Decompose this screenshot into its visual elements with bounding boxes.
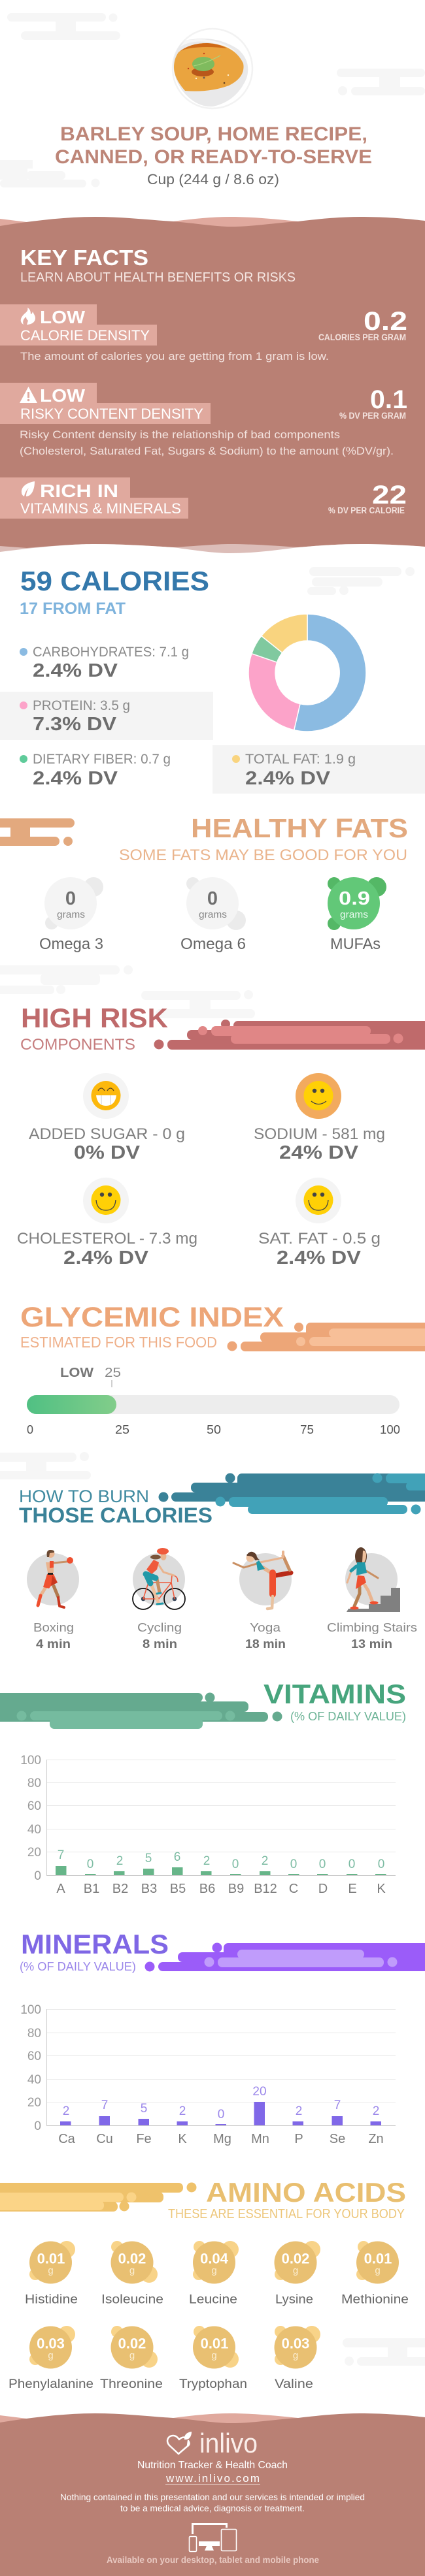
item: sodium [254, 1073, 385, 1163]
amino: histidine [25, 2242, 78, 2307]
bar chart: minerals: 2 [373, 2104, 379, 2118]
disclaimer: to be a medical advice, diagnosis or treatment. [120, 2504, 305, 2513]
item: sodium: SODIUM - 581 mg [254, 1125, 385, 1143]
bar chart: minerals: 20 [252, 2085, 267, 2099]
activity: boxing [27, 1550, 79, 1607]
panel: key facts [0, 217, 425, 556]
item: cholesterol: 2.4% DV [63, 1248, 149, 1268]
activity: yoga [233, 1552, 292, 1609]
bar chart: minerals: Fe [136, 2132, 152, 2146]
fact: risky content density [0, 383, 407, 457]
amino: histidine: 0.01 [37, 2251, 65, 2266]
panel: healthy fats [0, 813, 408, 953]
title: CANNED, OR READY-TO-SERVE [55, 146, 372, 168]
amino: tryptophan [179, 2326, 247, 2391]
heading: key facts: KEY FACTS [20, 246, 148, 270]
badge: mufas: 0.9 [339, 888, 370, 909]
heading: how to burn [19, 1487, 212, 1527]
amino: leucine: g [211, 2265, 217, 2276]
heading: how to burn: THOSE CALORIES [19, 1504, 212, 1527]
bar chart: vitamins: 0 [290, 1858, 297, 1871]
heading: calories: 17 FROM FAT [20, 600, 126, 618]
macro: protein [0, 692, 213, 740]
badge: mufas [328, 877, 386, 953]
amino: tryptophan: 0.01 [201, 2336, 228, 2351]
bar chart: vitamins: 0 [34, 1869, 41, 1883]
bar chart: vitamins: 0 [232, 1858, 239, 1871]
heading: amino acids [168, 2177, 406, 2221]
badge: omega 6: Omega 6 [180, 935, 246, 953]
logo: inlivo: inlivo [199, 2428, 258, 2458]
tagline: Nutrition Tracker & Health Coach [137, 2460, 288, 2471]
gauge: LOW [60, 1366, 94, 1380]
activity labels: 8 min [143, 1637, 177, 1650]
bar chart: minerals: 2 [179, 2104, 186, 2118]
macro: total fat [212, 745, 425, 794]
panel: high risk components [0, 965, 425, 1268]
heading: healthy fats: HEALTHY FATS [191, 813, 408, 843]
bar chart: vitamins: 60 [27, 1799, 41, 1813]
fact: calorie density: LOW [40, 307, 86, 327]
macro: protein: 7.3% DV [33, 714, 117, 735]
decorative header bar [0, 818, 75, 846]
badge: omega 6: 0 [207, 888, 218, 909]
badge: omega 3: Omega 3 [39, 935, 103, 953]
background cloud [0, 1452, 91, 1479]
icon: warning [20, 387, 37, 403]
heading: minerals [20, 1929, 169, 1973]
disclaimer [60, 2492, 365, 2513]
amino: leucine: Leucine [189, 2293, 237, 2307]
amino: phenylalanine: Phenylalanine [8, 2377, 94, 2391]
heading: calories [20, 566, 209, 618]
bar chart: minerals: 7 [101, 2099, 108, 2112]
macro: protein: PROTEIN: 3.5 g [33, 698, 130, 713]
macro: carbohydrates: 2.4% DV [33, 660, 118, 681]
amino: tryptophan: g [211, 2350, 217, 2361]
fact: rich in vitamins and minerals [0, 477, 407, 519]
amino: methionine: Methionine [341, 2293, 409, 2307]
heading: glycemic index: ESTIMATED FOR THIS FOOD [20, 1334, 217, 1351]
bar chart: vitamins: B9 [228, 1882, 244, 1896]
bar chart: vitamins: A [56, 1882, 65, 1896]
bar chart: vitamins: 80 [27, 1777, 41, 1790]
bar chart: vitamins: 0 [319, 1858, 326, 1871]
bar chart: minerals: Mg [213, 2132, 231, 2146]
heading: healthy fats [119, 813, 408, 864]
panel: minerals [20, 1929, 425, 2146]
amino badge blobs [29, 2241, 369, 2368]
bar chart: vitamins: 2 [203, 1854, 210, 1868]
activity labels: Boxing [33, 1621, 74, 1634]
heading: how to burn: HOW TO BURN [19, 1487, 149, 1506]
badge: omega 3 [39, 877, 103, 953]
activity labels: 4 min [36, 1637, 71, 1650]
activity labels [33, 1621, 417, 1650]
bar chart: minerals: P [294, 2132, 303, 2146]
bar chart: minerals: 0 [218, 2108, 224, 2121]
disclaimer: Nothing contained in this presentation and our services is intended or implied [60, 2492, 365, 2502]
bar chart: minerals: 40 [27, 2073, 41, 2087]
availability note: Available on your desktop, tablet and mobile phone [107, 2554, 319, 2565]
fact: risky content density: 0.1 [370, 385, 407, 414]
decorative header bar [145, 1942, 425, 1971]
bar chart: vitamins: 100 [20, 1754, 41, 1767]
fact: calorie density: The amount of calories you are getting from 1 gram is low. [20, 350, 329, 362]
bar chart: vitamins [20, 1754, 396, 1896]
bar chart: vitamins: D [318, 1882, 328, 1896]
bar chart: vitamins: 7 [58, 1848, 64, 1862]
activity: cycling [133, 1548, 185, 1609]
badge: mufas: MUFAs [330, 935, 381, 953]
panel: vitamins [0, 1679, 406, 1896]
panel: glycemic index [20, 1302, 425, 1436]
bar chart: minerals: 60 [27, 2050, 41, 2063]
heading: glycemic index [20, 1302, 284, 1351]
amino: methionine [341, 2242, 409, 2307]
bar chart: vitamins: 0 [378, 1858, 384, 1871]
bar chart: minerals: 2 [296, 2104, 302, 2118]
panel: amino acids [0, 2177, 425, 2391]
bar chart: vitamins: 20 [27, 1846, 41, 1860]
macro: carbohydrates: CARBOHYDRATES: 7.1 g [33, 645, 189, 660]
amino: lysine: Lysine [275, 2293, 313, 2307]
amino: valine: 0.03 [282, 2336, 309, 2351]
fact: calorie density [0, 304, 407, 362]
icon: devices [190, 2524, 237, 2551]
bar chart: vitamins: B2 [112, 1882, 128, 1896]
fact: rich in vitamins and minerals: VITAMINS & MINERALS [20, 500, 181, 517]
fact: risky content density: (Cholesterol, Saturated Fat, Sugars & Sodium) to the amount (%DV/gr). [20, 445, 394, 457]
item: sodium: 24% DV [279, 1142, 359, 1163]
decorative header bar [154, 1020, 425, 1050]
heading: minerals: MINERALS [21, 1929, 169, 1959]
item: added sugar: 0% DV [74, 1142, 141, 1163]
bar chart: vitamins: 2 [116, 1854, 123, 1868]
item: saturated fat: SAT. FAT - 0.5 g [258, 1230, 381, 1248]
background cloud [307, 567, 415, 595]
badge: omega 3: 0 [65, 888, 76, 909]
decorative header bar [0, 2183, 196, 2212]
item: added sugar [29, 1073, 185, 1163]
donut chart [248, 614, 366, 732]
activity labels: 13 min [351, 1637, 392, 1650]
amino: isoleucine: 0.02 [118, 2251, 146, 2266]
fact: risky content density: RISKY CONTENT DENSITY [20, 406, 203, 422]
amino: histidine: Histidine [25, 2293, 78, 2307]
heading: vitamins [264, 1679, 406, 1723]
amino: isoleucine: Isoleucine [101, 2293, 163, 2307]
fact: calorie density: CALORIE DENSITY [20, 327, 150, 344]
item: cholesterol: CHOLESTEROL - 7.3 mg [17, 1230, 197, 1248]
bar chart: minerals: Cu [96, 2132, 113, 2146]
macro: total fat: 2.4% DV [245, 768, 331, 789]
macro: dietary fiber: 2.4% DV [33, 768, 118, 789]
fact: calorie density: CALORIES PER GRAM [318, 332, 406, 342]
fact: risky content density: % DV PER GRAM [339, 411, 406, 421]
amino: lysine: g [293, 2265, 298, 2276]
macro: dietary fiber [20, 752, 171, 789]
panel: footer [0, 2413, 425, 2576]
bar chart: vitamins: 6 [174, 1850, 180, 1864]
macro: total fat: TOTAL FAT: 1.9 g [245, 752, 356, 767]
activity labels: Yoga [250, 1621, 281, 1634]
bar chart: minerals: 20 [27, 2096, 41, 2110]
icon: flame [21, 308, 35, 325]
amino: phenylalanine [8, 2326, 94, 2391]
logo: inlivo [167, 2428, 258, 2458]
bar chart: vitamins: B5 [170, 1882, 186, 1896]
bar chart: minerals: 7 [334, 2099, 341, 2112]
panel background with waves [0, 217, 425, 556]
fact: risky content density: LOW [40, 385, 86, 406]
badge: omega 6: grams [199, 909, 227, 920]
bar chart: vitamins: C [289, 1882, 298, 1896]
item: saturated fat: 2.4% DV [277, 1248, 362, 1268]
bar chart: minerals: 5 [141, 2102, 147, 2116]
amino: phenylalanine: g [48, 2350, 54, 2361]
gauge: 50 [207, 1423, 221, 1436]
bar chart: vitamins: 40 [27, 1823, 41, 1837]
macro: carbohydrates [20, 645, 189, 681]
bar chart: minerals: Zn [368, 2132, 384, 2146]
bar chart: minerals: 100 [20, 2003, 41, 2017]
background clouds [0, 965, 255, 1018]
bar chart: minerals: K [178, 2132, 187, 2146]
amino: threonine [100, 2326, 163, 2391]
serving size: Cup (244 g / 8.6 oz) [147, 171, 279, 187]
bar chart: vitamins: B1 [84, 1882, 99, 1896]
heading: key facts [20, 246, 296, 285]
bar chart: minerals: Ca [58, 2132, 76, 2146]
heading: calories: 59 CALORIES [20, 566, 209, 596]
bar chart: vitamins: 0 [87, 1858, 94, 1871]
amino: lysine: 0.02 [282, 2251, 309, 2266]
heading: vitamins: VITAMINS [264, 1679, 406, 1709]
activity labels: Climbing Stairs [327, 1621, 417, 1634]
fact: risky content density: Risky Content density is the relationship of bad components [20, 428, 340, 441]
amino: histidine: g [48, 2265, 54, 2276]
bar chart: vitamins: B6 [199, 1882, 215, 1896]
heading: vitamins: (% OF DAILY VALUE) [290, 1710, 406, 1723]
panel: how to burn calories [0, 1452, 425, 1650]
gauge: 25 [105, 1366, 121, 1380]
footer background with waves [0, 2413, 425, 2576]
background clouds [0, 13, 425, 187]
decorative header bar [228, 1323, 425, 1351]
amino: leucine [189, 2242, 237, 2307]
gauge: 100 [380, 1423, 400, 1436]
heading: healthy fats: SOME FATS MAY BE GOOD FOR YOU [119, 846, 407, 864]
decorative header bar [158, 1473, 425, 1514]
badge: omega 6 [180, 877, 246, 953]
fact: rich in vitamins and minerals: RICH IN [40, 481, 118, 501]
fact: rich in vitamins and minerals: 22 [372, 481, 407, 509]
gauge: 0 [27, 1423, 33, 1436]
decorative header bar [0, 1693, 282, 1729]
amino: lysine [275, 2242, 316, 2307]
amino: isoleucine [101, 2242, 163, 2307]
amino: tryptophan: Tryptophan [179, 2377, 247, 2391]
amino: phenylalanine: 0.03 [37, 2336, 65, 2351]
gauge [27, 1366, 400, 1436]
amino: threonine: Threonine [100, 2377, 163, 2391]
gauge: 75 [300, 1423, 314, 1436]
heading: minerals: (% OF DAILY VALUE) [20, 1960, 136, 1973]
item: cholesterol [17, 1178, 197, 1268]
heading: high risk: HIGH RISK [21, 1003, 168, 1033]
heading: amino acids: AMINO ACIDS [206, 2177, 406, 2208]
icon: leaf [22, 481, 35, 496]
amino: threonine: g [129, 2350, 135, 2361]
activity labels: Cycling [137, 1621, 182, 1634]
panel: calories [0, 566, 425, 794]
amino: threonine: 0.02 [118, 2336, 146, 2351]
bar chart: vitamins: 5 [145, 1852, 152, 1865]
amino: methionine: 0.01 [364, 2251, 392, 2266]
bar chart: vitamins: 2 [262, 1854, 268, 1868]
bar chart: vitamins: 0 [348, 1858, 355, 1871]
bar chart: minerals: 0 [34, 2119, 41, 2133]
item: saturated fat [258, 1178, 381, 1268]
heading: key facts: LEARN ABOUT HEALTH BENEFITS OR RISKS [20, 270, 296, 285]
amino: isoleucine: g [129, 2265, 135, 2276]
heading: glycemic index: GLYCEMIC INDEX [20, 1302, 284, 1333]
icon: soup bowl [173, 29, 252, 108]
badge: mufas: grams [340, 909, 368, 920]
heading: amino acids: THESE ARE ESSENTIAL FOR YOUR BODY [168, 2207, 405, 2221]
item: added sugar: ADDED SUGAR - 0 g [29, 1125, 185, 1143]
background cloud [343, 2338, 425, 2366]
header section [0, 13, 425, 187]
amino: valine [275, 2326, 316, 2391]
bar chart: vitamins: B12 [254, 1882, 277, 1896]
heading: high risk: COMPONENTS [20, 1036, 135, 1054]
bar chart: minerals: 80 [27, 2027, 41, 2040]
bar chart: minerals: 2 [63, 2104, 69, 2118]
website link: www.inlivo.com [165, 2472, 260, 2485]
title [55, 123, 372, 168]
badge: omega 3: grams [57, 909, 85, 920]
bar chart: minerals [20, 2003, 396, 2146]
heading: high risk [20, 1003, 168, 1054]
fact: calorie density: 0.2 [364, 307, 407, 336]
bar chart: minerals: Se [330, 2132, 345, 2146]
amino: valine: g [293, 2350, 298, 2361]
bar chart: vitamins: K [377, 1882, 386, 1896]
amino: valine: Valine [275, 2377, 313, 2391]
fact: rich in vitamins and minerals: % DV PER CALORIE [328, 506, 405, 515]
amino: leucine: 0.04 [200, 2251, 229, 2266]
macro: dietary fiber: DIETARY FIBER: 0.7 g [33, 752, 171, 767]
activity labels: 18 min [245, 1637, 286, 1650]
gauge: 25 [115, 1423, 129, 1436]
activity: climbing stairs [345, 1547, 400, 1612]
title: BARLEY SOUP, HOME RECIPE, [60, 123, 367, 145]
bar chart: vitamins: E [348, 1882, 357, 1896]
bar chart: minerals: Mn [251, 2132, 269, 2146]
amino: methionine: g [375, 2265, 381, 2276]
bar chart: vitamins: B3 [141, 1882, 157, 1896]
